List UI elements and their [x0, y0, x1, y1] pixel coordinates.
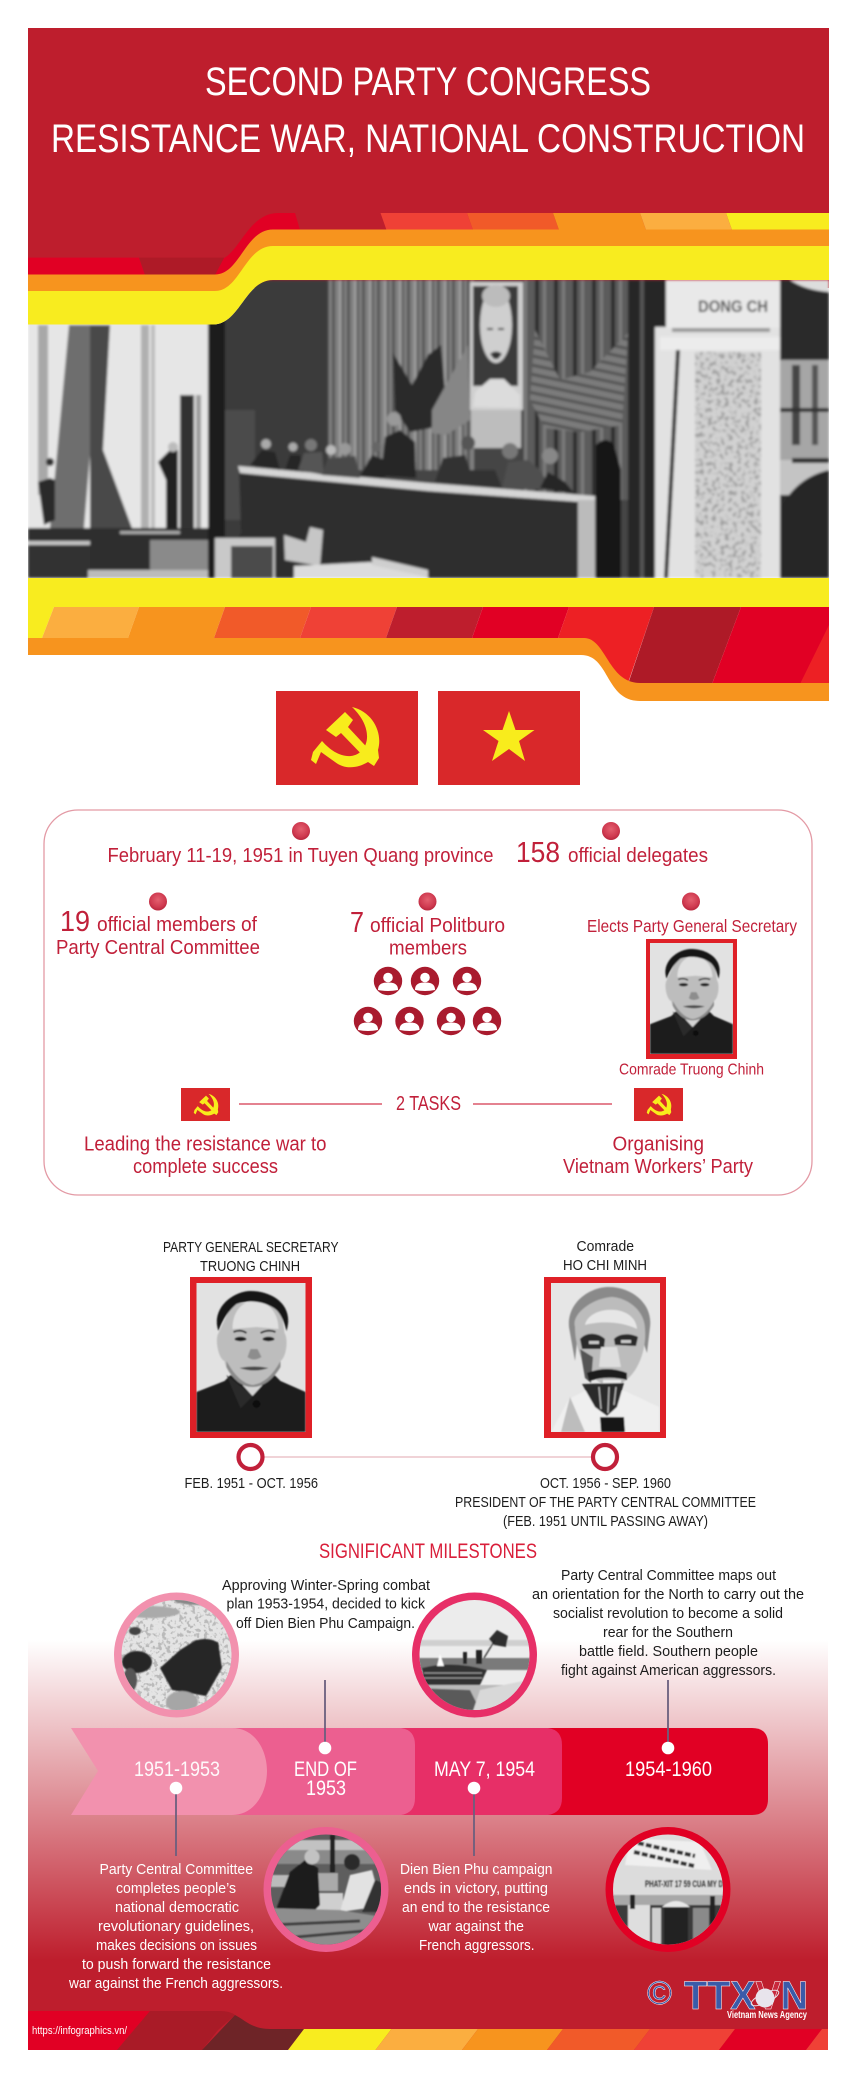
fact: delegates: official delegates — [568, 845, 708, 867]
leader: Truong Chinh — [163, 1239, 338, 1438]
task two: Organising — [612, 1134, 704, 1156]
header band — [28, 28, 829, 300]
fact: date and place — [108, 822, 494, 867]
lower photo band — [28, 578, 829, 701]
fact: politburo — [350, 892, 505, 1035]
photo: congress hall — [28, 280, 829, 578]
lower orange wave — [28, 638, 829, 701]
leader: Truong Chinh: TRUONG CHINH — [200, 1258, 300, 1275]
two tasks header: 2 TASKS — [396, 1093, 461, 1115]
side panel with sign — [655, 280, 780, 578]
task one — [84, 1134, 326, 1178]
photo circle: protest crowd: PHAT-XIT 17 59 CUA MY D — [645, 1879, 723, 1890]
fact: delegates — [516, 822, 708, 869]
milestone text: national democratic guidelines: to push forward the resistance — [82, 1956, 271, 1973]
timeline arrow — [71, 1680, 768, 1856]
yellow wave — [28, 246, 829, 324]
milestone text: national democratic guidelines: war against the French aggressors. — [68, 1975, 283, 1992]
side panel with sign: DONG CH — [698, 297, 768, 316]
far right — [780, 280, 829, 578]
logo: TTXVN: Vietnam News Agency — [727, 2009, 807, 2021]
fact: date and place: February 11-19, 1951 in Tuyen Quang province — [108, 845, 494, 867]
task two — [563, 1134, 753, 1178]
national flag — [438, 691, 580, 785]
photo circle: planning campaign — [263, 1827, 389, 1953]
icons: seven politburo members — [354, 967, 501, 1035]
standing guard — [596, 440, 621, 578]
milestone text: national democratic guidelines: national democratic — [115, 1899, 239, 1916]
heading: significant milestones: SIGNIFICANT MILESTONES — [319, 1540, 537, 1563]
milestone text: winter-spring plan — [222, 1577, 431, 1632]
leader: Truong Chinh: PARTY GENERAL SECRETARY — [163, 1239, 338, 1256]
milestone text: Dien Bien Phu victory — [400, 1861, 552, 1954]
milestone text: Dien Bien Phu victory: Dien Bien Phu campaign — [400, 1861, 552, 1878]
photo circle: supply bicycles — [114, 1592, 239, 1718]
left hall with curtains — [28, 324, 211, 578]
milestone text: national democratic guidelines: revolutionary guidelines, — [98, 1918, 254, 1935]
fact: politburo: official Politburo — [370, 915, 505, 937]
panel: milestones background — [28, 1640, 828, 1960]
leadership timeline: FEB. 1951 - OCT. 1956 — [184, 1475, 318, 1492]
orange wave — [28, 230, 829, 300]
fact: politburo: 7 — [350, 907, 364, 939]
timeline labels: 1954-1960 — [625, 1758, 712, 1781]
milestone text: winter-spring plan: off Dien Bien Phu Campaign. — [236, 1615, 415, 1632]
lower colour stripes — [28, 607, 829, 684]
milestone text: Dien Bien Phu victory: French aggressors. — [419, 1937, 534, 1954]
milestone text: winter-spring plan: plan 1953-1954, decided to kick — [226, 1596, 425, 1612]
milestone text: orientation for the North: Party Central Committee maps out — [561, 1567, 777, 1584]
photo circle: victory flag — [412, 1592, 540, 1720]
task one: Leading the resistance war to — [84, 1134, 326, 1156]
fact: general secretary: Comrade Truong Chinh — [619, 1062, 764, 1078]
milestone text: national democratic guidelines: completes people’s — [116, 1880, 236, 1897]
fact: central committee — [56, 892, 260, 959]
leader: Ho Chi Minh: Comrade — [576, 1238, 634, 1255]
party flag — [276, 691, 418, 785]
leader: Ho Chi Minh — [544, 1238, 666, 1438]
fact: general secretary — [587, 892, 797, 1078]
curtains — [328, 280, 666, 578]
leadership timeline: PRESIDENT OF THE PARTY CENTRAL COMMITTEE — [455, 1494, 756, 1511]
timeline labels: 1951-1953 — [134, 1758, 220, 1781]
fact: general secretary: Elects Party General Secretary — [587, 916, 797, 936]
fact: central committee: official members of — [97, 914, 257, 936]
photo circle: protest crowd — [605, 1827, 731, 1955]
fact: politburo: members — [389, 938, 467, 960]
milestone text: orientation for the North: fight against American aggressors. — [561, 1662, 776, 1679]
milestone text: national democratic guidelines: Party Central Committee — [100, 1861, 253, 1878]
milestone text: Dien Bien Phu victory: war against the — [428, 1918, 524, 1935]
milestone text: orientation for the North: rear for the Southern — [603, 1624, 733, 1641]
task one: complete success — [133, 1156, 278, 1178]
dark wall — [208, 280, 328, 578]
milestone text: national democratic guidelines — [68, 1861, 283, 1992]
leader: Ho Chi Minh: HO CHI MINH — [563, 1257, 647, 1274]
leadership timeline — [184, 1445, 756, 1530]
logo: TTXVN: TTXVN — [684, 1974, 808, 2018]
milestone text: Dien Bien Phu victory: an end to the resistance — [402, 1899, 550, 1916]
portrait of president — [470, 282, 523, 448]
timeline connectors — [176, 1680, 668, 1856]
timeline labels: END OF — [294, 1758, 357, 1781]
delegates at table — [250, 412, 575, 494]
timeline labels: MAY 7, 1954 — [434, 1758, 535, 1781]
logo: TTXVN: © — [647, 1974, 672, 2011]
milestone text: Dien Bien Phu victory: ends in victory, putting — [404, 1880, 548, 1897]
fact: delegates: 158 — [516, 837, 560, 869]
milestone text: orientation for the North: socialist revolution to become a solid — [553, 1605, 783, 1622]
milestone text: national democratic guidelines: makes decisions on issues — [96, 1937, 257, 1954]
task two: Vietnam Workers’ Party — [563, 1156, 753, 1178]
milestone text: orientation for the North — [532, 1567, 804, 1679]
fact: central committee: 19 — [60, 906, 90, 938]
milestone text: orientation for the North: battle field. Southern people — [579, 1643, 758, 1660]
top colour stripes — [28, 213, 829, 275]
chairs — [215, 527, 428, 578]
presidium table — [215, 466, 595, 578]
panel: congress facts — [44, 810, 812, 1195]
milestone text: orientation for the North: an orientation for the North to carry out the — [532, 1586, 804, 1603]
two tasks header — [181, 1088, 683, 1121]
timeline labels — [134, 1758, 712, 1800]
leadership timeline: OCT. 1956 - SEP. 1960 — [540, 1475, 671, 1492]
timeline labels: 1953 — [306, 1777, 346, 1800]
milestone text: winter-spring plan: Approving Winter-Spring combat — [222, 1577, 431, 1594]
milestones lower background — [28, 1960, 828, 2050]
title — [51, 60, 805, 161]
title: SECOND PARTY CONGRESS — [205, 60, 651, 104]
footer stripes — [28, 2011, 828, 2050]
leadership timeline: (FEB. 1951 UNTIL PASSING AWAY) — [503, 1513, 708, 1530]
source url: https://infographics.vn/ — [32, 2025, 128, 2037]
fact: central committee: Party Central Committee — [56, 937, 260, 959]
